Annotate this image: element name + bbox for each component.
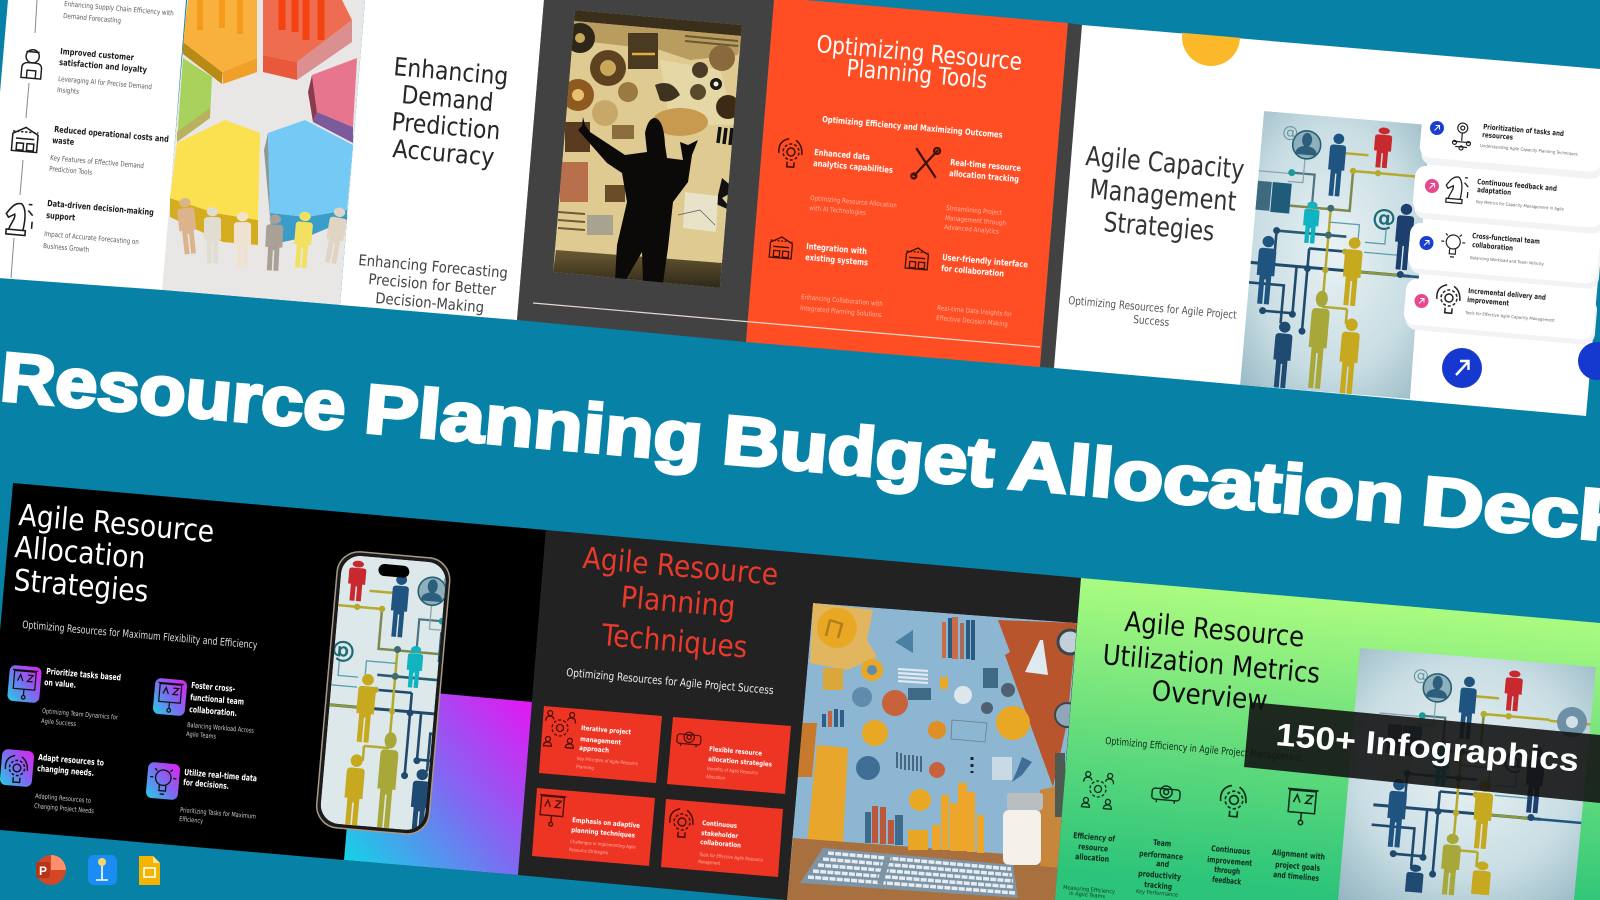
feature text: Enhancing Collaboration with	[801, 293, 883, 308]
title: Allocation	[1006, 426, 1408, 538]
panel: demand benefits list	[0, 0, 186, 290]
panel: Agile Resource Planning Techniques	[518, 530, 1082, 900]
card: flexible resource allocation	[667, 717, 791, 794]
panel: dark photo slide	[517, 0, 774, 342]
top slide band	[0, 0, 1600, 416]
feature text: Real-time resource	[950, 158, 1022, 174]
title	[0, 338, 1600, 557]
slide title: Strategies	[12, 563, 150, 610]
card: cross-functional	[1407, 222, 1600, 290]
slide subtitle: Optimizing Resources for Agile Project	[1068, 294, 1238, 322]
list text: Prediction Tools	[49, 165, 93, 177]
slide subtitle: Optimizing Efficiency and Maximizing Outcomes	[822, 115, 1003, 141]
slide subtitle: Precision for Better	[368, 270, 497, 299]
card: incremental delivery: improvement	[1467, 295, 1510, 308]
slide subtitle	[358, 251, 509, 316]
list text: Improved customer	[60, 47, 135, 63]
metric labels: Continuous	[1211, 844, 1251, 856]
slide title: Agile Resource	[1123, 605, 1306, 654]
slide title	[12, 498, 216, 610]
figures	[176, 197, 349, 271]
slide title: Strategies	[1102, 207, 1216, 248]
title: Deck	[1419, 462, 1600, 557]
feature text: Integrated Planning Solutions	[800, 304, 883, 319]
slide title	[581, 541, 780, 666]
feature text: changing needs.	[37, 764, 94, 779]
card: adaptive planning: Emphasis on adaptive	[572, 816, 641, 830]
metric labels: Key Performance	[1136, 889, 1179, 899]
banner: 150+ Infographics: 150+ Infographics	[1274, 716, 1580, 778]
list text: Insights	[57, 86, 80, 96]
photo: colored pie with figures	[162, 0, 365, 305]
metric labels: Team	[1153, 838, 1172, 849]
slide subtitle: Decision-Making	[375, 289, 485, 316]
card: iterative project management: Iterative project	[581, 724, 631, 736]
slide title: Agile Resource	[581, 541, 780, 593]
feature text: Enhanced data	[814, 148, 871, 163]
slide title: Planning	[619, 580, 737, 625]
feature text: Streamlining Project	[946, 204, 1003, 217]
metric icons	[1081, 771, 1319, 826]
slide title: Enhancing	[392, 52, 510, 91]
feature text: Adapting Resources to	[35, 792, 91, 805]
card: iterative project management: management	[580, 735, 621, 747]
panel: Enhancing Demand Prediction Accuracy	[340, 0, 544, 320]
icon: blue button edge	[1578, 342, 1600, 380]
feature text: collaboration.	[189, 705, 237, 719]
feature text: existing systems	[805, 253, 868, 268]
feature text	[800, 148, 1028, 328]
card: adaptive planning	[532, 788, 655, 866]
title: Planning	[362, 370, 706, 476]
card: incremental delivery	[1403, 278, 1598, 346]
slide title: Optimizing Resource	[815, 30, 1023, 76]
metric labels: and timelines	[1273, 870, 1320, 883]
card: flexible resource allocation: Allocation	[706, 774, 725, 782]
list text	[43, 0, 174, 254]
feature text: Advanced Analytics	[944, 223, 1000, 236]
panel: Optimizing Resource Planning Tools	[746, 0, 1068, 367]
slide title: Planning Tools	[845, 54, 988, 94]
list text: Enhancing Supply Chain Efficiency with	[64, 0, 174, 18]
list text: waste	[52, 136, 75, 148]
icon: building	[769, 236, 793, 259]
feature text: Optimizing Resource Allocation	[810, 194, 897, 210]
slide title: Agile Resource	[17, 498, 216, 550]
card: iterative project management: Key Principles of Agile Resource	[577, 756, 638, 767]
list text: Demand Forecasting	[63, 12, 121, 25]
feature text: functional team	[190, 693, 244, 708]
card: iterative project management: approach	[579, 744, 610, 755]
metric labels: feedback	[1212, 875, 1242, 887]
icon: Google Slides	[139, 856, 160, 885]
card: iterative project management	[539, 706, 662, 783]
icon: chess knight	[5, 202, 34, 236]
metric labels: productivity	[1138, 869, 1182, 882]
banner: 150+ Infographics	[1244, 702, 1600, 803]
slide title	[1101, 605, 1321, 717]
list text: Data-driven decision-making	[47, 199, 154, 218]
icon: Keynote	[88, 855, 117, 885]
card: cross-functional: Cross-functional team	[1472, 231, 1540, 246]
slide subtitle: Enhancing Forecasting	[358, 251, 509, 282]
icon: building	[905, 247, 929, 270]
feature text: analytics capabilities	[813, 159, 893, 176]
list text: satisfaction and loyalty	[59, 58, 148, 76]
feature text: with AI Technologies	[809, 204, 867, 217]
card: prioritization	[1419, 110, 1600, 180]
card: flexible resource allocation: Benefits of Agile Resource	[707, 766, 758, 776]
image: people network	[1338, 648, 1600, 900]
slide title: Accuracy	[391, 134, 496, 172]
icon: gear bulb	[777, 138, 803, 168]
card: feedback: Key Metrics for Capacity Management in Agile	[1476, 199, 1564, 212]
card: cross-functional: Balancing Workload and Team Velocity	[1470, 255, 1545, 266]
photo: man before data wall	[553, 10, 742, 290]
card: adaptive planning: Challenges in Implementing Agile	[570, 839, 636, 851]
slide title: Allocation	[13, 530, 147, 576]
metric labels: Alignment with	[1272, 848, 1326, 862]
metric labels: performance	[1139, 849, 1184, 862]
card: stakeholder collaboration: Tools for Effective Agile Resource	[698, 852, 763, 864]
list text: support	[46, 211, 75, 224]
card: adaptive planning: Resource Strategies	[569, 847, 609, 856]
list text: Business Growth	[43, 242, 89, 254]
title: Budget	[720, 401, 997, 502]
list text: Reduced operational costs and	[54, 125, 169, 145]
feature text: Optimizing Team Dynamics for	[42, 707, 118, 722]
metric labels	[1063, 831, 1326, 900]
list text: Key Features of Effective Demand	[50, 154, 144, 170]
metric labels: allocation	[1075, 852, 1110, 864]
feature text	[34, 667, 258, 825]
feature text: Management through	[945, 214, 1006, 227]
panel: Agile Resource Allocation Strategies	[0, 483, 546, 875]
card: adaptive planning: planning techniques	[571, 826, 635, 840]
card: stakeholder collaboration	[661, 799, 783, 877]
card: stakeholder collaboration: stakeholder	[701, 829, 739, 840]
slide subtitle: Optimizing Efficiency in Agile Project Management	[1105, 736, 1302, 764]
feature text: Balancing Workload Across	[187, 721, 255, 735]
feature text: Foster cross-	[191, 681, 236, 695]
metric labels: improvement	[1207, 855, 1253, 868]
phone mockup	[316, 551, 450, 835]
card: incremental delivery: Tools for Effective Agile Capacity Management	[1464, 310, 1555, 323]
silhouette	[578, 117, 698, 290]
app logos	[36, 855, 160, 885]
panel: Agile Capacity Management Strategies	[1054, 8, 1600, 416]
card: prioritization: resources	[1482, 130, 1513, 142]
feature text: for decisions.	[183, 778, 229, 792]
card: feedback: adaptation	[1477, 185, 1511, 197]
feature text: Agile Success	[41, 717, 77, 728]
card: stakeholder collaboration: Management	[698, 859, 720, 867]
metric labels: through	[1214, 865, 1241, 876]
feature text: Real-time Data Insights for	[937, 304, 1012, 319]
slide title: Utilization Metrics	[1101, 638, 1321, 690]
card: feedback	[1412, 165, 1600, 235]
slide title	[1084, 141, 1245, 248]
title: Resource	[0, 338, 349, 445]
list text: Leveraging AI for Precise Demand	[58, 75, 152, 91]
feature text: Efficiency	[179, 815, 204, 825]
slide title: Management	[1088, 174, 1238, 218]
slide subtitle: Success	[1133, 313, 1170, 329]
bottom slide band	[0, 483, 1600, 900]
card: prioritization: Understanding Agile Capacity Planning Techniques	[1480, 143, 1578, 157]
icon: PowerPoint: P	[39, 864, 47, 878]
metric labels: and	[1156, 859, 1170, 869]
card: cross-functional: collaboration	[1472, 240, 1513, 253]
icon: yellow circle	[1182, 32, 1240, 66]
slide title: Overview	[1150, 674, 1269, 717]
feature text: Utilize real-time data	[184, 768, 258, 784]
card: iterative project management: Planning	[576, 764, 594, 772]
card: incremental delivery: Incremental delivery and	[1468, 286, 1546, 302]
list text: Impact of Accurate Forecasting on	[44, 230, 139, 246]
metric labels: Measuring Efficiency	[1063, 885, 1116, 896]
icon: worker	[21, 49, 43, 79]
card: stakeholder collaboration: collaboration	[700, 838, 742, 850]
icon: wrench and screwdriver	[911, 146, 940, 181]
photo: desk with 3D charts	[787, 603, 1082, 900]
metric labels: Efficiency of	[1073, 831, 1116, 844]
feature text: for collaboration	[941, 264, 1004, 279]
feature text: on value.	[44, 678, 76, 691]
card: feedback: Continuous feedback and	[1477, 177, 1557, 193]
panel: Agile Resource Utilization Metrics Overview	[1055, 578, 1600, 900]
slide subtitle: Optimizing Resources for Maximum Flexibility and Efficiency	[22, 619, 258, 652]
feature text: Adapt resources to	[38, 753, 104, 769]
feature text: Prioritize tasks based	[46, 667, 121, 684]
feature icons	[0, 665, 188, 800]
feature text: allocation tracking	[949, 169, 1019, 185]
image: people network	[1240, 111, 1427, 399]
slide title	[815, 30, 1023, 94]
card: stakeholder collaboration: Continuous	[702, 819, 737, 830]
slide title: Agile Capacity	[1084, 141, 1245, 186]
card: prioritization: Prioritization of tasks and	[1483, 122, 1564, 138]
feature text: Changing Project Needs	[34, 802, 95, 815]
card: flexible resource allocation: Flexible resource	[709, 745, 763, 758]
gradient rectangle	[344, 686, 532, 875]
slide title	[390, 52, 510, 172]
slide title: Techniques	[599, 618, 749, 666]
metric labels: project goals	[1275, 860, 1321, 873]
slide title: Prediction	[390, 107, 502, 145]
card: flexible resource allocation: allocation strategies	[708, 755, 772, 769]
icon: blue arrow button	[1442, 348, 1482, 388]
feature text: Prioritizing Tasks for Maximum	[180, 806, 256, 821]
feature text: User-friendly interface	[942, 253, 1028, 270]
metric labels: tracking	[1144, 880, 1173, 891]
slide subtitle: Optimizing Resources for Agile Project Success	[566, 666, 774, 697]
feature text: Integration with	[806, 242, 867, 257]
slide title: Demand	[400, 80, 495, 117]
strip between slides	[1040, 23, 1082, 368]
feature text: Effective Decision Making	[936, 314, 1008, 328]
icon: building	[11, 126, 39, 153]
feature text: Agile Teams	[186, 730, 217, 741]
metric labels: resource	[1078, 842, 1109, 854]
